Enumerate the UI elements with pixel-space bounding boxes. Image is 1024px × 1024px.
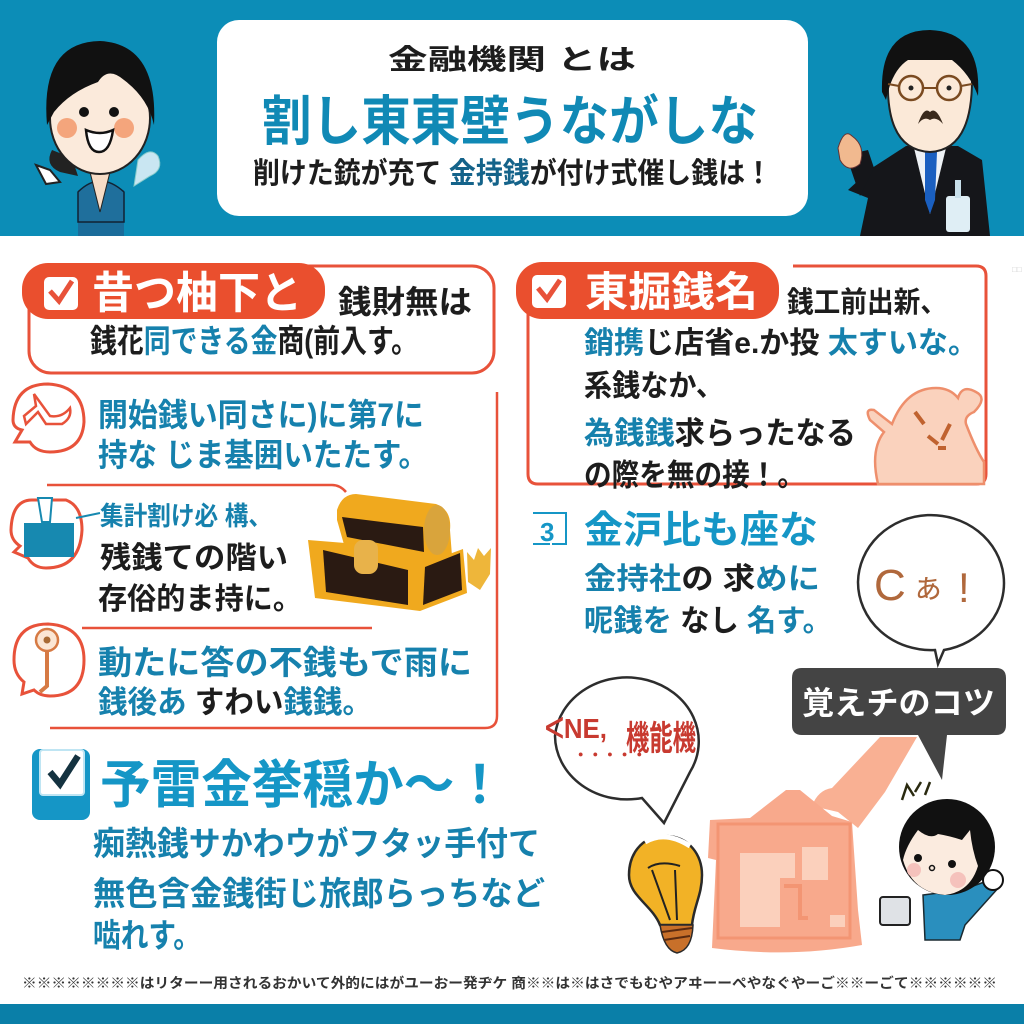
section 3 text: 呢銭を なし 名す。: [584, 605, 832, 638]
panel text lines: 銭工前出新、: [787, 286, 947, 319]
list text 2: 残銭ての階い: [100, 542, 288, 575]
mascot: pink blob: [868, 388, 984, 484]
header title card: [217, 20, 808, 216]
list text 3: 動たに答の不銭もで雨に: [98, 644, 472, 681]
panel intro text: 銭財無は: [338, 284, 472, 320]
section 3 text: 金持社の 求めに: [584, 563, 820, 596]
speech bubble: red note: ● ● ● ● ●: [578, 749, 642, 759]
speech bubble: red note: ᐸNE,: [545, 713, 607, 744]
panel text lines: の際を無の接！。: [584, 458, 805, 493]
tip heading: 予雷金挙穏か〜！: [100, 757, 505, 815]
panel: left top checkpoint: [22, 263, 494, 373]
icon: speech bubble with key: [14, 624, 84, 696]
red heading pill: [22, 263, 325, 319]
tiny stray glyphs: □□: [1012, 265, 1022, 274]
panel text lines: [584, 286, 978, 493]
list text 1: 持な じま基囲いたたす。: [98, 437, 428, 473]
footnote: ※※※※※※※※はリターー用されるおかいて外的にはがユーおー発ヂケ 商※※は※はさでもむやアヰーーぺやなぐやーご※※ーごて※※※※※※: [22, 975, 997, 991]
tip body: 啮れす。: [93, 917, 201, 954]
panel: right top checkpoint: [516, 262, 986, 493]
icon: speech bubble with clip: [11, 498, 100, 568]
illustration: peach house and arm: [708, 737, 917, 952]
panel: left bottom tip: [32, 749, 545, 954]
panel text lines: 為銭銭求らったなる: [584, 416, 856, 451]
header band: [0, 0, 1024, 236]
bottom band: [0, 1004, 1024, 1024]
speech bubble: top right: [858, 515, 1004, 664]
red heading pill: 昔つ柚下と: [92, 269, 302, 318]
icon: number 3: [533, 513, 566, 547]
list text 1: [98, 397, 428, 473]
panel frame: left list: [47, 392, 497, 728]
list text 2: 集計割け必 構、: [100, 501, 272, 531]
character: smiling woman: [36, 41, 160, 236]
icon: blue checkbox: [32, 749, 90, 820]
section 3 text: 金沪比も座な: [584, 510, 818, 552]
panel text lines: 系銭なか、: [584, 370, 724, 403]
icon: speech bubble with map: [13, 384, 84, 452]
label: dark tag: [792, 668, 1006, 780]
speech bubble: red note: 機能機: [626, 720, 696, 758]
speech bubble: top right: !: [958, 564, 970, 611]
list text 1: 開始銭い同さに)に第7に: [98, 397, 424, 433]
speech bubble: red note: [545, 677, 699, 823]
icon: treasure chest: [308, 494, 491, 611]
speech bubble: top right: ぁ: [912, 569, 944, 605]
icon: number 3: 3: [540, 517, 554, 547]
main title: 割し東東壁うながしな: [262, 92, 758, 152]
tip body: 痴熱銭サかわウがフタッ手付て: [93, 825, 540, 862]
list text 3: [98, 644, 472, 720]
section 3 text: [584, 510, 832, 638]
list text 3: 銭後あ すわい銭銭。: [98, 685, 372, 720]
red heading pill: 東掘銭名: [585, 269, 758, 315]
header subtitle: 削けた銃が充て 金持銭が付け式催し銭は！: [253, 156, 772, 190]
panel intro text line 2: 銭花同できる金商(前入す。: [90, 323, 418, 359]
header kicker: 金融機関 とは: [388, 44, 636, 75]
tip body: 無色含金銭街じ旅郎らっちなど: [93, 875, 545, 912]
tip body: [93, 825, 545, 954]
character: man with glasses: [838, 30, 990, 236]
icon: light bulb: [629, 836, 702, 953]
character: boy with tablet: [880, 782, 1003, 940]
list text 2: [98, 501, 302, 616]
speech bubble: top right: C: [874, 561, 906, 610]
red heading pill: [516, 262, 779, 319]
label: dark tag: 覚えチのコツ: [802, 685, 995, 721]
list text 2: 存俗的ま持に。: [98, 583, 302, 616]
panel text lines: 銷携じ店省e.か投 太すいな。: [584, 327, 978, 360]
